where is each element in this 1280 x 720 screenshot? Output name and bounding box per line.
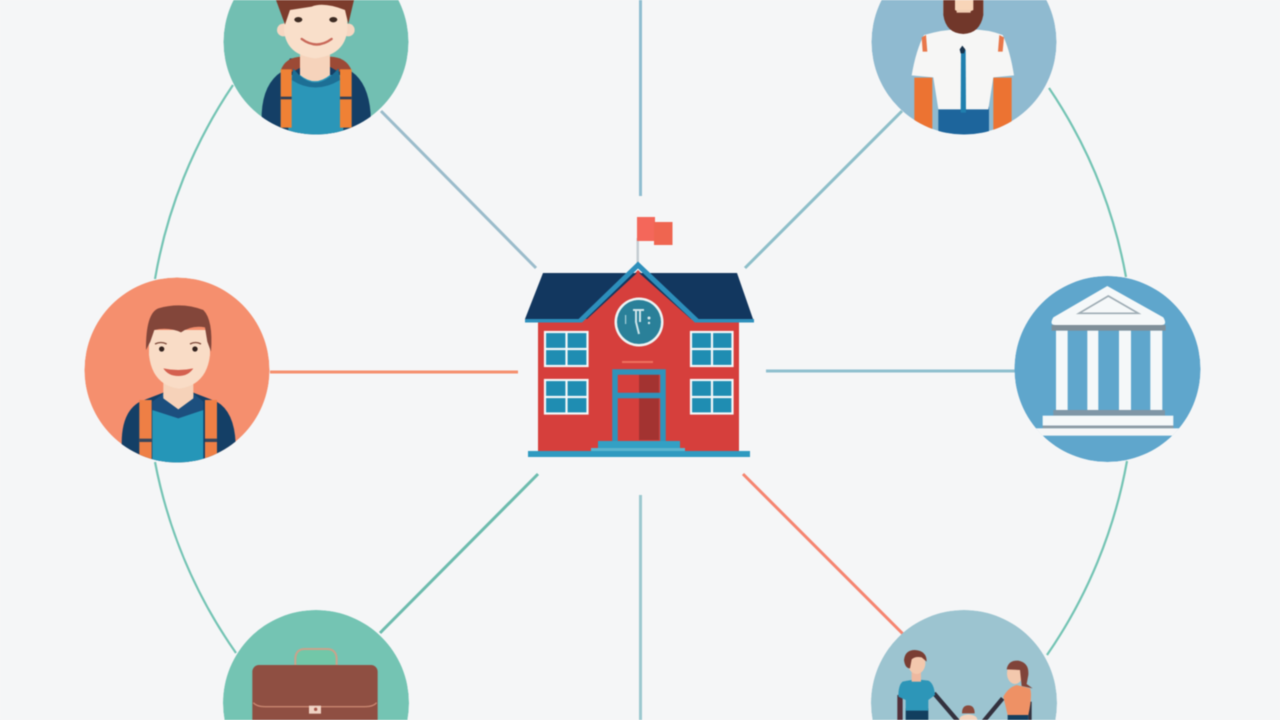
node: briefcase bottom left [223,610,409,720]
node: student top left [224,0,408,140]
icon: briefcase [252,649,378,720]
clock [614,298,664,346]
clothing [912,29,1014,137]
node: teacher top right [872,0,1056,137]
flag [636,217,672,264]
school building [525,217,754,457]
child [959,705,977,720]
walls [538,270,739,452]
mother [983,661,1033,720]
connectors from school to stakeholders [270,0,1015,720]
roof [525,265,754,322]
base [1035,416,1182,436]
door [615,361,663,441]
head [276,0,355,81]
bearded head [943,0,983,34]
body and backpack [122,393,236,467]
outer ring arcs [155,85,1127,655]
node: family bottom right [871,610,1057,720]
node: student left [84,278,270,467]
node: institution right [1014,276,1200,462]
father [897,650,958,720]
windows [545,332,732,414]
steps and base [528,441,750,457]
columns [1053,331,1165,416]
pediment [1052,286,1166,331]
backpack and body [262,57,371,140]
head [146,305,211,397]
